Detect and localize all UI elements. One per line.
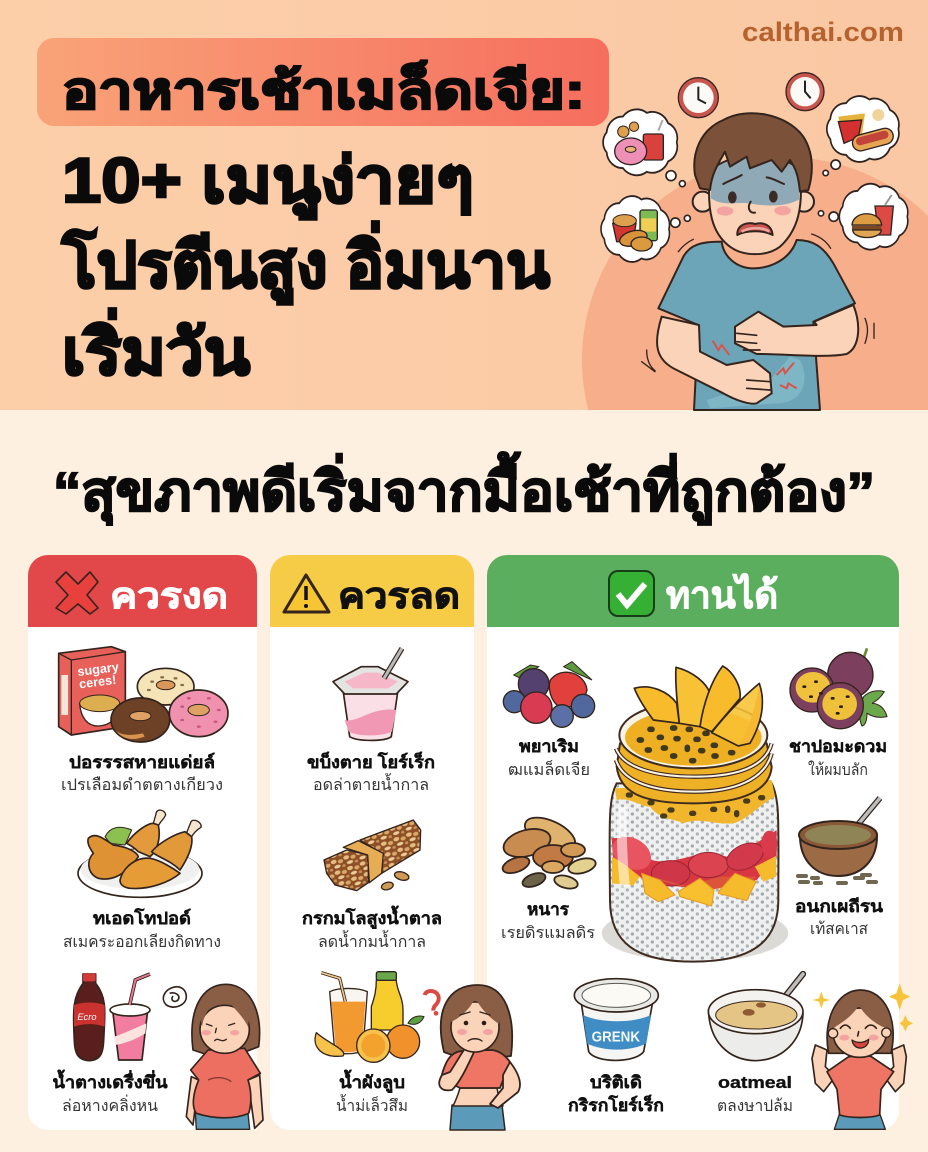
- food: greek yogurt: GRENK: [592, 1030, 640, 1046]
- title text: เริ่มวัน: [62, 308, 250, 388]
- food: cola bottle and soft drink: [74, 973, 186, 1061]
- label: yogurt: อดล่าตายน้ำกาล: [313, 773, 429, 794]
- label: seeds: [795, 896, 883, 938]
- illustration: stressed man with food thoughts: [601, 73, 908, 410]
- food: passion fruit: [790, 648, 887, 729]
- label: greek yogurt: กริรกโยร์เร็ก: [568, 1093, 664, 1115]
- hero background: [0, 0, 928, 410]
- panel header: avoid: ควรงด: [110, 575, 228, 616]
- quote heading: “สุขภาพดีเริ่มจากมื้อเช้าที่ถูกต้อง”: [53, 452, 875, 526]
- label: sugary drinks: น้ำตางเดรื่งขึ่น: [52, 1069, 168, 1092]
- label: cereal: เปรเลือมดำตตางเกียวง: [61, 776, 223, 794]
- label: berries: ฒแมล็ดเจีย: [508, 759, 590, 779]
- thought bubble: fried chicken and can: [601, 196, 690, 262]
- panel header: can eat: [487, 555, 899, 627]
- label: yogurt: ขบ็งตาย โยร์เร็ก: [307, 750, 435, 772]
- label: passion fruit: ชาปอมะดวม: [789, 737, 887, 756]
- food: sugary cereal and donuts: [59, 647, 228, 742]
- thought bubble: fries and hotdog: [823, 96, 899, 176]
- character: happy woman: [812, 983, 913, 1129]
- panel header: reduce: ควรลด: [338, 575, 460, 616]
- thought bubble: burger and soda: [818, 184, 908, 250]
- food: flaxseed bowl: [798, 798, 880, 883]
- label: yogurt: [307, 750, 435, 794]
- label: nuts: [501, 900, 595, 942]
- label: fried food: [63, 908, 221, 951]
- food: granola bar: [324, 820, 421, 891]
- panel header: can eat: ทานได้: [666, 573, 778, 617]
- icon: clocks: [678, 73, 824, 118]
- panel header: avoid: [28, 555, 257, 627]
- label: sugary drinks: [52, 1069, 168, 1115]
- title badge: อาหารเช้าเมล็ดเจีย:: [62, 60, 585, 119]
- panel: avoid (red): [28, 555, 263, 1130]
- label: seeds: เท้สคเาส: [810, 920, 868, 938]
- label: granola: กรกมโลสูงน้ำตาล: [302, 905, 442, 930]
- food: juice and oranges: [315, 972, 439, 1062]
- label: sugary drinks: ล่อหางคลิ่งหน: [62, 1094, 158, 1115]
- label: greek yogurt: [568, 1073, 664, 1115]
- food: chia pudding jar: [602, 666, 788, 962]
- panel: can eat (green): [487, 555, 913, 1130]
- food: sugary cereal and donuts: ceres!: [78, 673, 117, 691]
- title text: [61, 146, 550, 388]
- label: fried food: ทเอดโทปอด์: [93, 908, 191, 928]
- title text: 10+ เมนูง่ายๆ: [62, 146, 474, 220]
- label: greek yogurt: บริติเดิ: [590, 1073, 642, 1092]
- title badge: [37, 38, 609, 126]
- label: oatmeal: oatmeal: [718, 1073, 792, 1092]
- panel header: reduce: [270, 555, 474, 627]
- label: passion fruit: ให้ผมบลัก: [808, 760, 868, 779]
- food: oatmeal bowl: [708, 974, 803, 1061]
- label: fruit juice: น้ำผังลูบ: [339, 1069, 405, 1094]
- food: sugary cereal and donuts: sugary: [77, 660, 120, 679]
- label: cereal: [61, 752, 223, 794]
- food: mixed berries: [503, 662, 595, 727]
- label: fruit juice: [336, 1069, 408, 1115]
- label: granola: ลดน้ำกมน้ำกาล: [318, 930, 426, 951]
- label: fried food: สเมคระออกเลียงกิดทาง: [63, 933, 221, 951]
- label: passion fruit: [789, 737, 887, 779]
- food: greek yogurt: [574, 979, 658, 1060]
- label: fruit juice: น้ำม่เล็วสึม: [336, 1094, 408, 1115]
- man body: [642, 234, 874, 410]
- label: seeds: อนกเผถีรน: [795, 896, 883, 916]
- label: oatmeal: [717, 1073, 793, 1115]
- label: berries: พยาเริม: [519, 737, 579, 756]
- site name: calthai.com: [742, 17, 904, 47]
- food: flavored yogurt: [333, 648, 408, 740]
- panel: reduce (yellow): [270, 555, 474, 1130]
- food: nuts: [500, 811, 597, 891]
- man head: [693, 113, 814, 254]
- thought bubble: donut and soda: [603, 109, 685, 187]
- food: fried chicken plate: [78, 810, 202, 897]
- label: oatmeal: ตลงษาปล้ม: [717, 1097, 793, 1115]
- title text: โปรตีนสูง อิ่มนาน: [61, 221, 550, 305]
- label: nuts: เรยดิรแมลดิร: [501, 925, 595, 942]
- food: cola bottle and soft drink: Ecro: [77, 1012, 97, 1022]
- label: cereal: ปอรรรสหายแด่ยล์: [69, 752, 215, 772]
- label: berries: [508, 737, 590, 779]
- label: nuts: หนาร: [527, 900, 570, 919]
- character: overweight woman: [186, 984, 263, 1129]
- character: thinking woman: [439, 985, 520, 1130]
- label: granola: [302, 905, 442, 951]
